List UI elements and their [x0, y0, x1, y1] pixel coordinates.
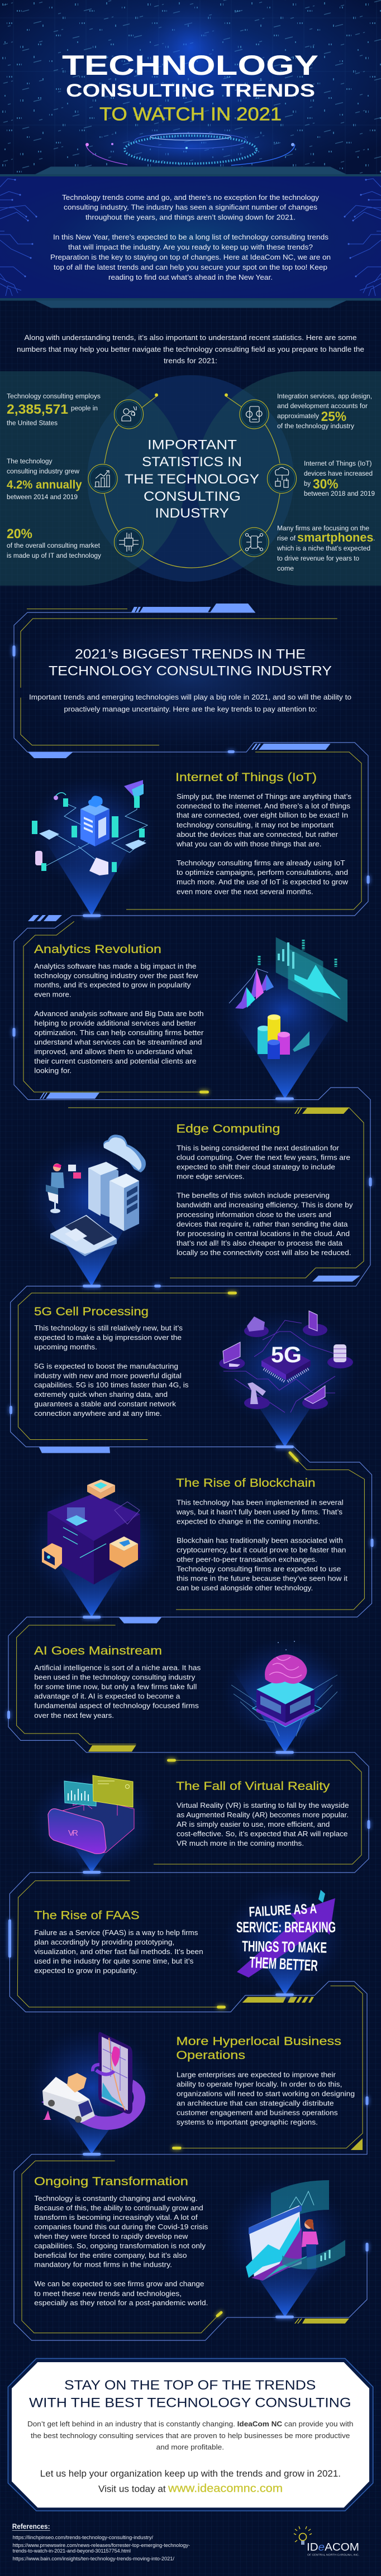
illustration: 5G chip with devices: 5G	[271, 1343, 302, 1367]
heading: WITH THE BEST TECHNOLOGY CONSULTING	[29, 2395, 351, 2410]
body text: ways, but it hasn’t fully been used by firms. That’s	[176, 1509, 342, 1516]
body text	[34, 1664, 201, 1720]
panel: AI Goes Mainstream	[34, 1639, 349, 1754]
stat: integration services: and development accounts for	[277, 402, 368, 410]
icon: circuit chip	[114, 528, 143, 557]
body text: transform is becoming increasingly vital. A lot of	[34, 2214, 198, 2221]
body text: This technology is still relatively new, but it’s	[34, 1324, 183, 1332]
body text	[177, 1802, 349, 1847]
body text: visualization, and other fast fail methods. It’s been	[34, 1948, 203, 1956]
logo: IdeaCom: IDeACOM	[307, 2541, 359, 2554]
illustration: VR headset: VR	[68, 1828, 78, 1838]
body text: more edge services.	[177, 1173, 245, 1181]
body text: about the devices that are connected, but rather	[177, 831, 338, 839]
body text: expected to grow in popularity.	[34, 1967, 138, 1975]
body text: companies found this out during the Covid-19 crisis	[34, 2223, 208, 2231]
heading: Ongoing Transformation	[34, 2175, 188, 2188]
body text	[176, 793, 351, 896]
stat: smartphones: rise of	[277, 534, 296, 542]
intro text: reading to find out what’s ahead in the New Year.	[108, 273, 273, 281]
frame: gold inner lines	[17, 609, 364, 2333]
body text: an architecture that can strategically distribute	[177, 2100, 334, 2108]
illustration: digital transformation	[221, 2177, 349, 2317]
body text: mandatory for most firms in the industry.	[34, 2261, 172, 2269]
statistics intro text: trends for 2021:	[164, 356, 217, 365]
panel: Analytics Revolution	[34, 937, 349, 1100]
body text: what you can do with those things that are.	[176, 840, 322, 848]
body text: their current customers and potential clients are	[34, 1057, 197, 1065]
heading	[176, 2035, 341, 2062]
body text	[34, 1929, 203, 1975]
body text: systems to important geographic regions.	[177, 2119, 318, 2127]
body text	[177, 2071, 355, 2127]
intro text: consulting industry. The industry has seen a significant number of changes	[64, 203, 318, 212]
body text: months, and it’s expected to grow in popularity	[34, 981, 191, 989]
stat: market share	[7, 526, 102, 559]
body text: expected to shift their cloud strategy to include	[177, 1163, 335, 1171]
references	[12, 2522, 190, 2561]
call to action text: www.ideacomnc.com	[168, 2482, 283, 2494]
icon: cloud devices	[267, 465, 296, 494]
title: CONSULTING TRENDS	[66, 80, 315, 100]
body text: can be used alongside other technology.	[177, 1584, 313, 1592]
body text: Blockchain has traditionally been associated with	[177, 1536, 343, 1544]
illustration: failure as a service	[223, 1884, 346, 1995]
body text: organizations will need to start working on designing	[177, 2090, 355, 2098]
references: trends-to-watch-in-2021-and-beyond-301157754.html	[13, 2548, 131, 2554]
body text	[34, 1324, 189, 1418]
intro text: Technology trends come and go, and there’s no exception for the technology	[62, 193, 320, 202]
heading: More Hyperlocal Business	[176, 2035, 341, 2048]
stat: market share: 20%	[7, 526, 32, 542]
body text: even more.	[34, 991, 71, 999]
stat: IoT devices	[304, 459, 375, 497]
stat: smartphones: which is a niche that’s expected	[277, 544, 370, 552]
body text: other peer-to-peer transaction exchanges.	[177, 1555, 317, 1563]
call to action text: Let us help your organization keep up with the trends and grow in 2021.	[40, 2468, 341, 2479]
text: trends intro	[29, 693, 351, 714]
stat: employment: people in	[71, 404, 98, 412]
body text: expected to change in the coming months.	[177, 1517, 320, 1525]
heading: biggest trends: 2021’s BIGGEST TRENDS IN THE	[75, 647, 306, 662]
intro text: top of all the latest trends and can help you secure your spot on the top too! Keep	[54, 263, 327, 271]
body text: that are connected, over eight billion to be exact! In	[177, 812, 348, 820]
body text: Virtual Reality (VR) is starting to fall by the wayside	[177, 1802, 349, 1809]
body text: cost-effective. So, it’s expected that AR will replace	[177, 1830, 347, 1838]
body text: cryptocurrency, but it could prove to be faster than	[177, 1546, 346, 1554]
stat: employment	[7, 392, 101, 427]
body text: advantage of it. AI is expected to become a	[34, 1692, 180, 1700]
body text: connected to the internet. And there’s a lot of things	[177, 802, 350, 810]
statistics heading: THE TECHNOLOGY	[125, 472, 259, 487]
body text: technology consulting, it may not be important	[177, 821, 334, 829]
body text: especially as they retool for a post-pandemic world.	[34, 2299, 208, 2307]
stat: IoT devices: 30%	[313, 477, 339, 492]
panel: 5G Cell Processing	[34, 1305, 359, 1448]
body text: Don’t get left behind in an industry that is constantly changing. IdeaCom NC can provide you with	[27, 2420, 353, 2428]
body text: The benefits of this switch include preserving	[177, 1191, 330, 1199]
icon: support agent	[114, 400, 143, 429]
illustration: IoT network	[28, 776, 156, 916]
stat: market share: is made up of IT and technology	[7, 552, 102, 559]
references: https://linchpinseo.com/trends-technology-consulting-industry/	[13, 2535, 154, 2540]
body text	[34, 2195, 208, 2307]
body text: plan accordingly by providing prototyping,	[34, 1938, 174, 1946]
body text: processing information close to the users and	[177, 1211, 331, 1219]
heading: Edge Computing	[176, 1123, 280, 1136]
logo: IdeaCom	[294, 2526, 359, 2556]
panel: The Rise of Blockchain	[24, 1477, 348, 1619]
body text: AR is simply easier to use, more efficient, and	[177, 1821, 330, 1828]
heading: The Rise of FAAS	[34, 1909, 140, 1922]
stat: growth: 4.2% annually	[7, 478, 82, 491]
body text: much more. And the use of IoT is expected to grow	[177, 878, 349, 886]
statistics heading: STATISTICS IN	[142, 454, 242, 470]
body text: This is being considered the next destination for	[177, 1145, 339, 1152]
stat: employment: Technology consulting employs	[7, 392, 101, 400]
body text: the best technology consulting services that are proven to help businesses be more productive	[31, 2432, 350, 2440]
illustration: VR headset	[28, 1770, 156, 1876]
body text: used in the industry for quite some time, but it’s	[34, 1957, 193, 1965]
stat: smartphones: Many firms are focusing on the	[277, 524, 369, 532]
stat: growth: between 2014 and 2019	[7, 493, 78, 501]
icon: growth chart	[88, 465, 117, 494]
stat: growth	[7, 457, 82, 501]
panel: The Fall of Virtual Reality	[28, 1770, 349, 1876]
text: trends intro: proactively manage uncertainty. Here are the key trends to pay attention to:	[64, 705, 317, 714]
stat: smartphones: come	[277, 564, 294, 572]
intro text: that will impact the industry. Are you ready to keep up with these trends?	[68, 243, 313, 251]
references: https://www.prnewswire.com/news-releases/forrester-top-emerging-technology-	[13, 2543, 190, 2548]
heading: The Rise of Blockchain	[176, 1477, 316, 1490]
body text: connection anywhere and at any time.	[34, 1410, 162, 1418]
body text: over the next few years.	[34, 1712, 114, 1720]
heading: The Fall of Virtual Reality	[176, 1780, 330, 1793]
body text: understand what services can be streamlined and	[34, 1038, 202, 1046]
title: TECHNOLOGY	[62, 50, 318, 81]
body text: that’s not all! It’s also cheaper to process the data	[177, 1239, 342, 1247]
stat: integration services: 25%	[321, 409, 346, 424]
hero background: data tunnel	[0, 0, 381, 176]
statistics heading: CONSULTING	[144, 489, 241, 504]
panel glow behind trends heading	[12, 606, 369, 751]
stat: growth: The technology	[7, 457, 53, 465]
illustration: 5G chip with devices	[213, 1309, 359, 1447]
panel: Internet of Things	[28, 771, 351, 917]
stat: market share: of the overall consulting market	[7, 542, 101, 549]
body text: capabilities. 5G is 100 times faster than 4G, is	[34, 1381, 189, 1389]
body text: bandwidth and increasing efficiency. This is done by	[177, 1201, 353, 1209]
body text: when they were forced to rapidly develop new	[34, 2233, 188, 2240]
call to action text	[40, 2468, 341, 2494]
panel: More Hyperlocal Business Operations	[25, 2027, 355, 2156]
stat: integration services	[277, 392, 372, 430]
intro text	[50, 193, 331, 281]
stat: IoT devices: by	[304, 480, 311, 487]
illustration: brain on chip	[221, 1639, 349, 1753]
intro text: throughout the years, and things aren’t slowing down for 2021.	[85, 213, 296, 221]
illustration: analytics charts	[221, 937, 349, 1099]
stat: smartphones	[277, 524, 375, 572]
heading: biggest trends: TECHNOLOGY CONSULTING INDUSTRY	[49, 663, 332, 678]
frame decorations: bars and capsules	[7, 604, 373, 2324]
body text: Technology consulting firms are already using IoT	[177, 859, 345, 867]
body text: technology consulting industry over the past few	[34, 972, 198, 980]
body text: guarantees a stable and constant network	[34, 1400, 177, 1408]
body text: Technology consulting firms are expected to use	[177, 1565, 341, 1573]
body text: VR much more in the coming months.	[177, 1840, 304, 1847]
illustration: failure as a service: THINGS TO MAKE	[242, 1938, 327, 1956]
body text: to optimize campaigns, perform consultations, and	[177, 869, 348, 877]
panel: The Rise of FAAS	[34, 1884, 346, 1996]
body text: improved, and allows them to understand what	[34, 1048, 193, 1056]
stat: IoT devices: between 2018 and 2019	[304, 490, 375, 497]
text: trends intro: Important trends and emerging technologies will play a big role in 2021, and so will the ability to	[29, 693, 351, 701]
intro text: In this New Year, there’s expected to be a long list of technology consulting trends	[53, 233, 329, 241]
body text: optimization. This can help consulting firms better	[34, 1029, 204, 1037]
icon: mobile app settings	[240, 400, 269, 429]
body text: Because of this, the ability to continually grow and	[34, 2204, 203, 2212]
call to action text: Visit us today at	[98, 2483, 166, 2494]
body text: fundamental aspect of technology focused firms	[34, 1702, 199, 1710]
body text: Advanced analysis software and Big Data are both	[34, 1010, 204, 1018]
body text: Failure as a Service (FAAS) is a way to help firms	[34, 1929, 198, 1937]
panel: Ongoing Transformation	[34, 2175, 349, 2318]
statistics intro text: numbers that may help you better navigate the technology consulting field as you prepare to handle the	[17, 345, 364, 353]
title	[62, 50, 318, 124]
statistics intro text: Along with understanding trends, it’s also important to understand recent statistics. Here are some	[25, 333, 356, 342]
stat: integration services: Integration services, app design,	[277, 392, 372, 400]
body text: for some time now, but only a few firms take full	[34, 1683, 197, 1691]
body text: devices that require it, rather than sending the data	[177, 1220, 347, 1228]
illustration: failure as a service: THEM BETTER	[249, 1953, 318, 1974]
statistics heading: INDUSTRY	[155, 506, 229, 521]
illustration: blockchain cube	[24, 1479, 164, 1617]
references: https://www.bain.com/insights/ten-technology-trends-moving-into-2021/	[13, 2556, 175, 2561]
body text: helping to provide additional services and better	[34, 1019, 196, 1027]
body text: locally so the connectivity cost will also be reduced.	[177, 1249, 351, 1257]
illustration: edge servers and laptop	[22, 1134, 162, 1286]
frame: blue connector line	[8, 612, 372, 2340]
body text: ability to operate hyper locally. In order to do this,	[177, 2081, 342, 2089]
body text: industry with new and more powerful digital	[34, 1372, 182, 1380]
intro text: Preparation is the key to staying on top of changes. Here at IdeaCom NC, we are on	[50, 253, 331, 261]
logo: IdeaCom: OF CENTRAL NORTH CAROLINA, INC.	[307, 2554, 359, 2556]
body text: Simply put, the Internet of Things are anything that’s	[177, 793, 351, 801]
body text: extremely quick when sharing data, and	[34, 1391, 168, 1399]
stat: growth: consulting industry grew	[7, 467, 79, 475]
statistics heading: IMPORTANT	[147, 438, 237, 452]
body text: to meet these new trends and technologies,	[34, 2290, 182, 2297]
stat: smartphones: .	[373, 534, 375, 542]
body text	[177, 1145, 353, 1257]
body text: We can be expected to see firms grow and change	[34, 2280, 204, 2288]
illustration: failure as a service: FAILURE AS A	[249, 1901, 317, 1920]
references: References:	[12, 2522, 50, 2530]
stat: integration services: approximately	[277, 412, 320, 420]
body text: been used in the technology consulting industry	[34, 1674, 196, 1682]
body text: cloud computing. Over the next few years, firms are	[177, 1154, 350, 1162]
body text: Large enterprises are expected to improve their	[177, 2071, 336, 2079]
heading: Operations	[176, 2049, 245, 2062]
body text: and more profitable.	[156, 2444, 224, 2451]
body text: expected to make a big impression over the	[34, 1334, 182, 1342]
heading: AI Goes Mainstream	[34, 1644, 162, 1657]
body text: Analytics software has made a big impact in the	[34, 963, 196, 970]
heading: biggest trends	[49, 647, 332, 678]
stat: IoT devices: devices have increased	[304, 470, 373, 477]
stat: smartphones: smartphones	[297, 530, 373, 544]
body text: upcoming months.	[34, 1343, 97, 1351]
heading: STAY ON THE TOP OF THE TRENDS	[64, 2378, 316, 2393]
panel: statistics	[0, 371, 381, 586]
body text: 5G is expected to boost the manufacturing	[34, 1362, 178, 1370]
statistics heading	[125, 438, 259, 521]
body text	[34, 963, 204, 1075]
title: TO WATCH IN 2021	[99, 104, 282, 124]
body text	[27, 2420, 353, 2451]
body text: Technology is constantly changing and evolving.	[34, 2195, 198, 2202]
icon: network phone	[240, 528, 269, 557]
body text: looking for.	[34, 1067, 72, 1075]
illustration: delivery van and map phone	[25, 2027, 159, 2154]
body text	[176, 1498, 348, 1592]
stat: smartphones: to drive revenue for years to	[277, 554, 359, 562]
heading	[29, 2378, 351, 2410]
body text: even more over the next several months.	[177, 888, 313, 896]
stat: integration services: of the technology industry	[277, 422, 355, 430]
statistics intro text	[17, 333, 364, 365]
body text: capabilities. So, ongoing transformation is not only	[34, 2242, 206, 2250]
body text: customer engagement and business operations	[177, 2109, 338, 2117]
heading: Internet of Things (IoT)	[175, 771, 317, 784]
intro panel	[0, 166, 381, 308]
body text: for processing in central locations in the cloud. And	[177, 1230, 350, 1238]
heading: Analytics Revolution	[34, 943, 161, 956]
body text: beneficial for the entire company, but it’s also	[34, 2252, 187, 2259]
panel: call to action	[8, 2358, 373, 2511]
panel: Edge Computing	[22, 1123, 353, 1287]
stat: employment: 2,385,571	[7, 402, 68, 417]
body text: this more in the future because they’ve seen how it	[177, 1575, 348, 1583]
body text: as Augmented Reality (AR) becomes more popular.	[177, 1811, 349, 1819]
stat: IoT devices: Internet of Things (IoT)	[304, 459, 372, 467]
heading: 5G Cell Processing	[34, 1305, 149, 1318]
gold ring	[104, 393, 280, 568]
stat: employment: the United States	[7, 419, 58, 427]
body text: This technology has been implemented in several	[177, 1498, 344, 1506]
body text: Artificial intelligence is sort of a niche area. It has	[34, 1664, 201, 1672]
